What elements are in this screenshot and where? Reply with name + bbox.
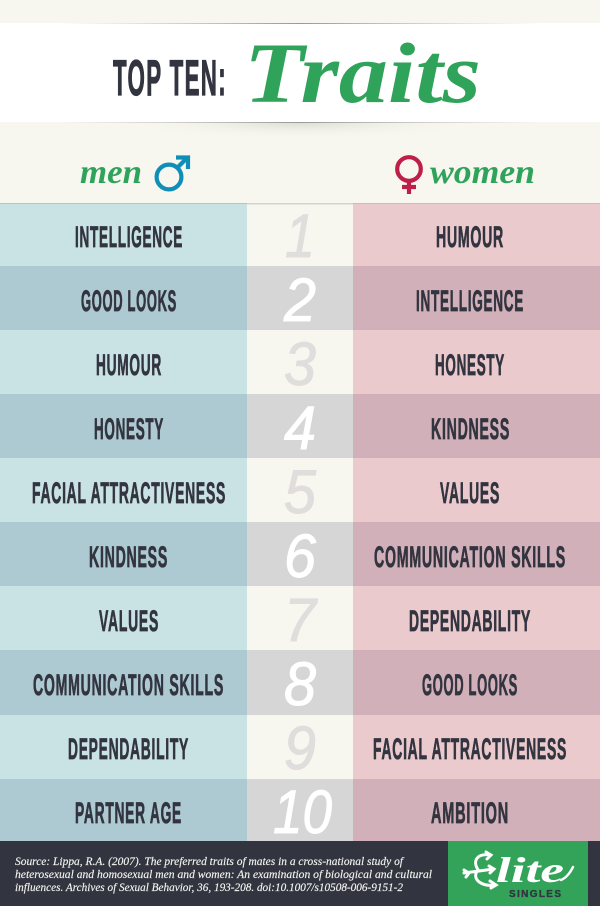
icon: male symbol (157, 158, 188, 189)
heading: men: men (80, 154, 142, 191)
logo mark: arrow E (464, 852, 496, 888)
rank 10: 10 (273, 778, 332, 846)
footer bar (0, 841, 600, 906)
rank 1: 1 (285, 202, 315, 270)
table: men column: GOOD LOOKS (81, 285, 177, 318)
title banner (0, 23, 600, 155)
rank 7: 7 (284, 586, 318, 654)
logo: Elite Singles (448, 841, 588, 906)
table: women column: HONESTY (435, 349, 505, 382)
rank 9: 9 (284, 714, 316, 782)
source citation: influences. Archives of Sexual Behavior, 36, 193-208. doi:10.1007/s10508-006-9151-2 (15, 882, 403, 894)
table: men column (0, 203, 247, 841)
table: women column: HUMOUR (436, 221, 504, 254)
rank 4: 4 (284, 394, 316, 462)
table: men column: HUMOUR (96, 349, 162, 382)
title: traits: Traits (244, 25, 481, 121)
rank 2: 2 (283, 266, 316, 334)
table: men column: DEPENDABILITY (68, 733, 189, 766)
table: men column: COMMUNICATION SKILLS (33, 669, 224, 702)
logo word: singles: SINGLES (509, 889, 561, 900)
table: women column: VALUES (440, 477, 500, 510)
source citation: heterosexual and homosexual men and women: An examination of biological and cultural (15, 869, 432, 881)
table: women column: KINDNESS (431, 413, 510, 446)
rank 3: 3 (284, 330, 316, 398)
table: men column: FACIAL ATTRACTIVENESS (32, 477, 226, 510)
table: men column: KINDNESS (89, 541, 168, 574)
heading: women: women (430, 154, 535, 191)
table: women column (353, 203, 600, 841)
table: rank column (247, 202, 353, 846)
icon: female symbol (397, 157, 421, 194)
source citation: Source: Lippa, R.A. (2007). The preferred traits of mates in a cross-national study of (15, 856, 405, 868)
rank 8: 8 (284, 650, 316, 718)
rank 5: 5 (284, 458, 317, 526)
table: women column: AMBITION (431, 797, 509, 830)
title banner: TOP TEN: (113, 50, 227, 106)
table: men column: HONESTY (94, 413, 164, 446)
source citation (15, 856, 432, 894)
table: men column: INTELLIGENCE (75, 221, 183, 254)
table: men column: PARTNER AGE (75, 797, 182, 830)
rank 6: 6 (284, 522, 316, 590)
logo word: lite: lite (496, 850, 564, 890)
table: men column: VALUES (99, 605, 159, 638)
logo tail stroke (561, 867, 573, 880)
